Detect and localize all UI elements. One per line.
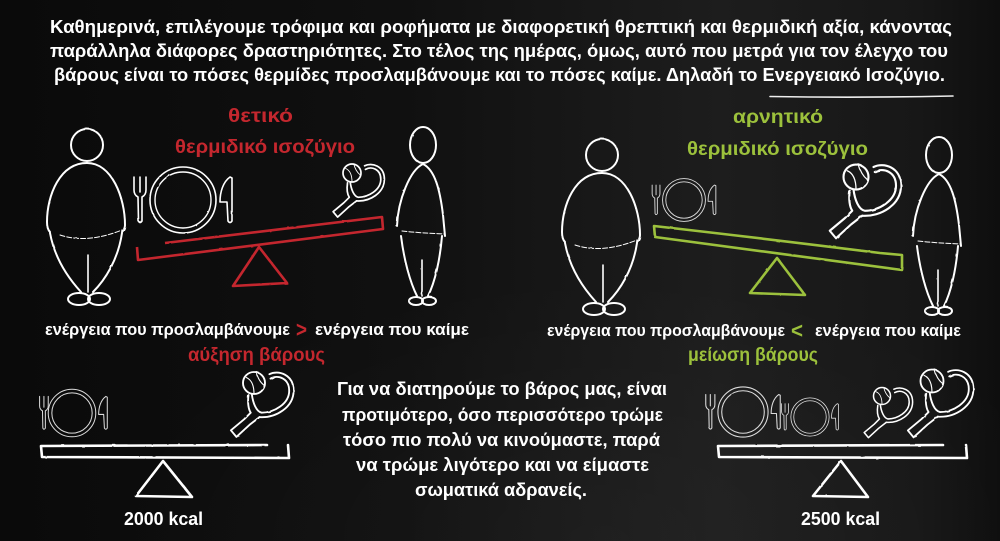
intro text block [50,17,952,86]
panel: balanced 2000 kcal seesaw [40,372,294,529]
seesaw: red fulcrum [233,247,287,286]
icon: large tennis racket [908,370,973,437]
icon: plate and cutlery [40,389,107,437]
heading: positive calorie balance [175,106,355,158]
seesaw: white fulcrum [136,461,192,497]
advice text block: σωματικά αδρανείς. [415,480,587,500]
icon: tennis racket [231,372,294,437]
result: weight gain: αύξηση βάρους [188,345,325,366]
icon: second plate and cutlery [782,398,838,436]
equation: negative balance: ενέργεια που καίμε [815,321,961,340]
icon: large tennis racket [830,164,901,238]
intro text block: παράλληλα διάφορες δραστηριότητες. Στο τέλος της ημέρας, όμως, αυτό που μετρά για τον έλεγχο του [50,41,948,61]
panel: balanced 2500 kcal seesaw [706,370,973,529]
heading: positive calorie balance: θερμιδικό ισοζύγιο [175,137,355,158]
result: weight loss: μείωση βάρους [688,345,818,366]
seesaw: green tilted beam [654,226,902,295]
advice text block: τόσο πιο πολύ να κινούμαστε, παρά [343,430,660,450]
equation: negative balance [547,318,961,343]
label: 2000 kcal: 2000 kcal [124,509,203,529]
icon: slim figure [913,137,961,315]
label: 2500 kcal: 2500 kcal [801,509,880,529]
seesaw: white level beam [41,445,289,497]
equation: negative balance: ενέργεια που προσλαμβάνουμε [547,321,785,340]
advice text block: προτιμότερο, όσο περισσότερο τρώμε [342,405,663,425]
heading: negative calorie balance: θερμιδικό ισοζύγιο [687,139,868,160]
seesaw: white fulcrum [813,461,868,497]
icon: overweight figure [47,129,125,305]
seesaw: green fulcrum [750,258,805,295]
equation: negative balance: < [791,318,803,343]
icon: first plate and cutlery [706,387,780,437]
panel: negative calorie balance [547,107,961,366]
equation: positive balance: > [296,317,307,342]
icon: overweight figure [562,139,640,315]
icon: small plate and cutlery [652,179,716,221]
panel: positive calorie balance [45,106,469,366]
intro text block: Καθημερινά, επιλέγουμε τρόφιμα και ροφήματα με διαφορετική θρεπτική και θερμιδική αξία, κάνοντας [50,17,952,38]
heading: negative calorie balance [687,107,868,160]
equation: positive balance: ενέργεια που προσλαμβάνουμε [45,320,290,339]
seesaw: white level beam [718,445,967,497]
advice text block: να τρώμε λιγότερο και να είμαστε [356,455,649,475]
advice text block [337,379,667,500]
heading: positive calorie balance: θετικό [228,106,293,127]
equation: positive balance: ενέργεια που καίμε [315,320,469,339]
advice text block: Για να διατηρούμε το βάρος μας, είναι [337,379,667,399]
icon: tennis racket [333,164,384,217]
underline: energy balance [770,96,953,97]
icon: slim figure [397,127,445,305]
icon: plate and cutlery [134,167,232,233]
icon: small tennis racket [864,388,913,438]
heading: negative calorie balance: αρνητικό [733,107,823,128]
equation: positive balance [45,317,469,342]
intro text block: βάρους είναι το πόσες θερμίδες προσλαμβάνουμε και το πόσες καίμε. Δηλαδή το Ενεργειακό Ισοζύγιο. [54,65,945,86]
seesaw: red tilted beam [137,217,383,286]
